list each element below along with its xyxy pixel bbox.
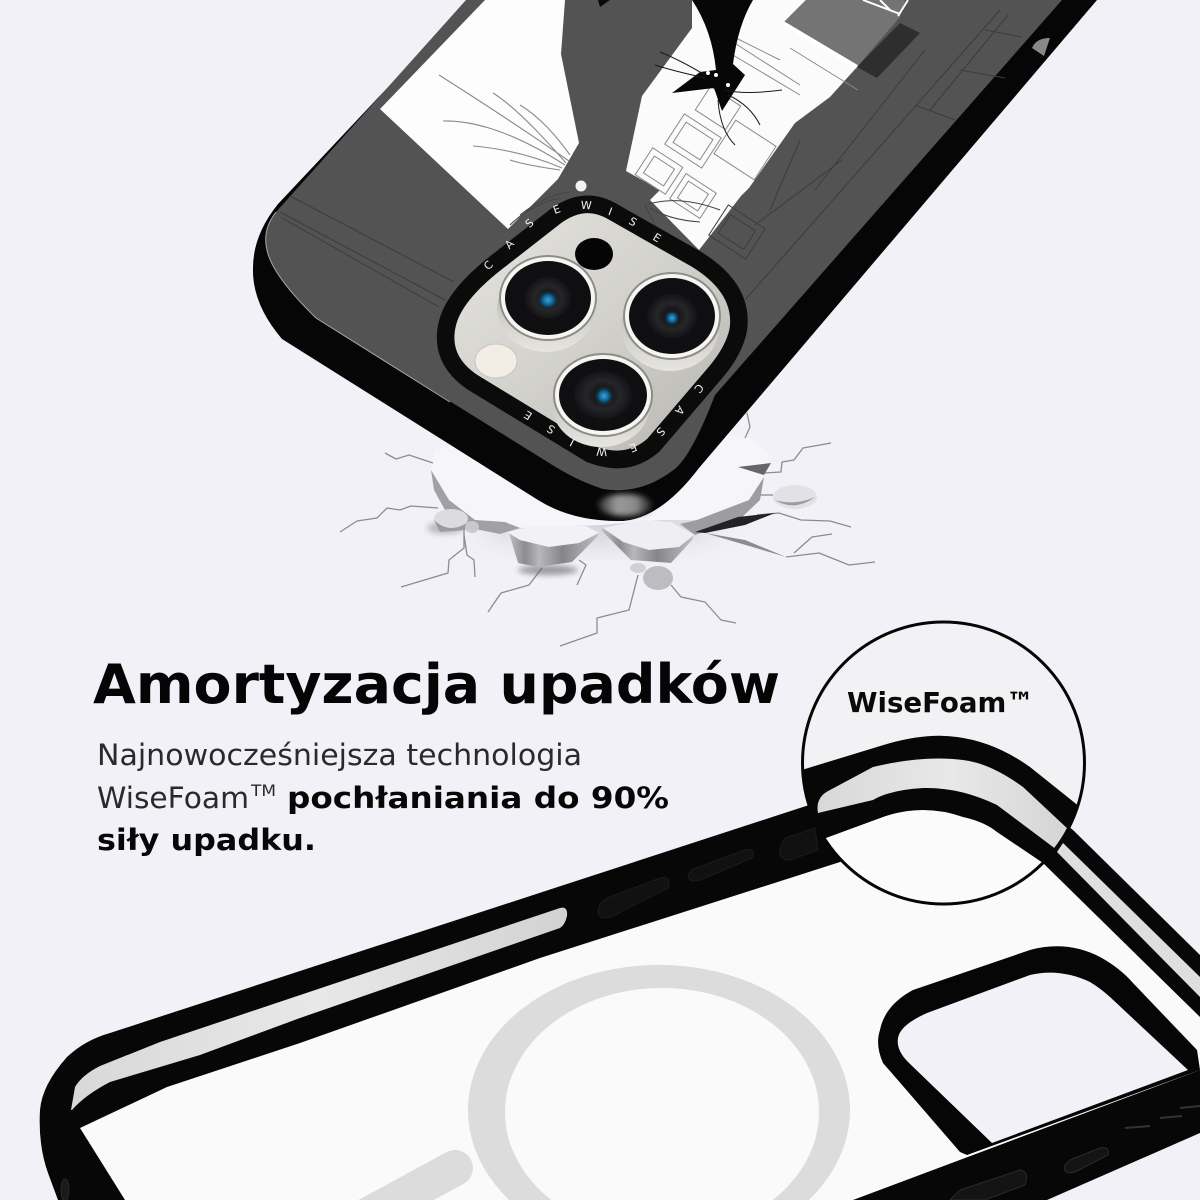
artwork: whiskers near ring — [510, 192, 720, 225]
cracked ground illustration — [340, 413, 875, 646]
lens bottom — [552, 353, 653, 447]
ring lettering: E — [650, 231, 663, 245]
magnifier circle — [780, 620, 1090, 910]
ring lettering: A — [502, 237, 517, 252]
ring lettering — [481, 199, 706, 458]
magnified clear back — [826, 810, 1042, 902]
heading: Amortyzacja upadków — [93, 653, 780, 716]
magnet ring — [468, 965, 850, 1200]
circle outline — [802, 622, 1084, 904]
artwork: white wall left — [380, 0, 579, 229]
body text: siły upadku. — [97, 823, 316, 857]
artwork: lines on grey wall — [280, 10, 1022, 307]
ring lettering: I — [606, 205, 614, 218]
magnified frame — [804, 736, 1077, 862]
shattered fragments — [518, 565, 578, 575]
clear back — [80, 825, 1200, 1200]
back panel — [266, 0, 1062, 490]
circle label: WiseFoam™ — [847, 686, 1034, 719]
artwork: dot — [576, 180, 586, 192]
ring lettering: S — [545, 422, 558, 436]
cutout opening — [898, 973, 1188, 1143]
flash — [475, 344, 517, 378]
body text: Najnowocześniejsza technologia — [97, 738, 582, 772]
ring lettering: C — [691, 381, 706, 396]
artwork: black cat — [598, 0, 782, 145]
side buttons — [598, 828, 818, 918]
panel edge highlight — [266, 212, 450, 402]
artwork: white wall right — [626, 0, 857, 250]
phone with case, top — [253, 0, 1097, 521]
camera hole — [575, 238, 613, 270]
ring lettering: E — [628, 440, 639, 455]
lens top left — [497, 255, 597, 352]
ring lettering: E — [551, 202, 562, 217]
magnified silver side — [818, 758, 1067, 848]
corner streaks — [1125, 1106, 1200, 1128]
body text: WiseFoam — [97, 781, 249, 815]
ring lettering: W — [580, 199, 592, 212]
magnet pill — [350, 1168, 455, 1200]
ring lettering: S — [626, 215, 639, 229]
artwork: door panels — [635, 35, 858, 218]
ring lettering: A — [672, 403, 687, 418]
artwork: whiskers left — [439, 75, 570, 170]
body text — [97, 738, 669, 857]
silver side left — [71, 908, 567, 1110]
ring lettering: E — [522, 408, 535, 422]
ring lettering: C — [481, 258, 496, 273]
case black bumper — [253, 0, 1097, 521]
bottom buttons — [61, 1148, 1108, 1200]
artwork: window — [783, 0, 920, 78]
crack lines — [340, 413, 875, 646]
side button glint — [1032, 38, 1050, 56]
case frame — [40, 756, 1200, 1200]
clear case, bottom — [40, 756, 1200, 1200]
ring lettering: W — [596, 445, 608, 458]
ring lettering: S — [523, 216, 537, 231]
lens right — [621, 272, 721, 371]
camera cutout — [878, 946, 1200, 1155]
camera ring — [446, 204, 739, 459]
bumper corner highlight — [598, 494, 652, 516]
circle background — [800, 620, 1090, 910]
silver side right — [1057, 843, 1200, 997]
ring lettering: S — [653, 424, 668, 439]
ring lettering: I — [568, 436, 577, 449]
body text: TM — [250, 781, 276, 800]
body text: pochłaniania do 90% — [287, 781, 669, 815]
